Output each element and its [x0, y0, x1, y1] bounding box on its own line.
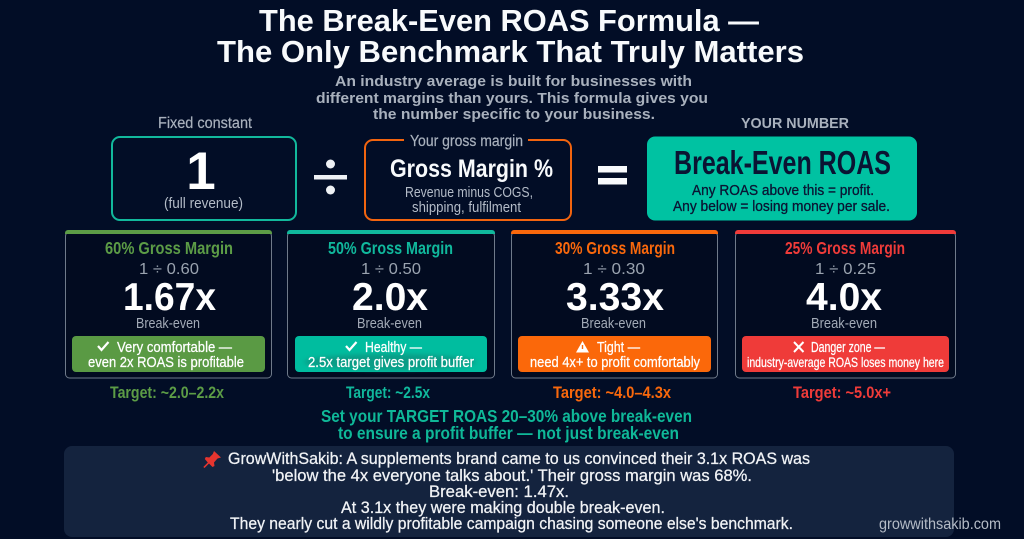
title: The Break-Even ROAS Formula — [259, 3, 759, 38]
case study text: At 3.1x they were making double break-even. [341, 499, 665, 517]
target ROAS advice [321, 406, 692, 443]
panel: GrowWithSakib case study [64, 446, 954, 537]
icon: equals sign [598, 166, 627, 184]
intro text: different margins than yours. This formula gives you [316, 90, 708, 107]
target: 60% margin: Target: ~2.0–2.2x [110, 383, 224, 402]
formula term: fixed constant: (full revenue) [164, 195, 243, 212]
panel: 50% margin card: 1 ÷ 0.50 [361, 261, 421, 278]
formula term: gross margin: shipping, fulfilment [412, 200, 521, 216]
formula result: break-even ROAS: Any below = losing money per sale. [673, 199, 890, 215]
target ROAS advice: to ensure a profit buffer — not just break-even [338, 423, 679, 443]
target ROAS advice: Set your TARGET ROAS 20–30% above break-even [321, 406, 692, 426]
panel: 30% margin card: 3.33x [566, 276, 664, 319]
formula term: fixed constant [112, 115, 296, 220]
formula result: break-even ROAS: Break-Even ROAS [674, 144, 891, 181]
case study text: 'below the 4x everyone talks about.' Their gross margin was 68%. [272, 467, 752, 485]
status pill: very comfortable: Very comfortable — [117, 339, 232, 356]
intro text: the number specific to your business. [373, 106, 655, 123]
panel: 30% margin card: Break-even [581, 316, 646, 332]
icon: divide sign [314, 160, 347, 194]
panel: 25% margin card: Break-even [811, 316, 877, 332]
target: 30% margin: Target: ~4.0–4.3x [553, 383, 671, 402]
panel: 30% margin card: 30% Gross Margin [555, 238, 675, 258]
panel: 25% margin card: 25% Gross Margin [785, 238, 905, 258]
formula term: gross margin: Revenue minus COGS, [405, 185, 533, 201]
formula term: gross margin [365, 133, 571, 220]
panel: 50% margin card: Break-even [357, 316, 422, 332]
status pill: danger zone: industry-average ROAS loses money here [747, 354, 944, 370]
target: 25% margin: Target: ~5.0x+ [793, 383, 891, 402]
formula term: gross margin: Your gross margin [410, 133, 523, 150]
icon: pushpin [203, 451, 221, 468]
case study text: GrowWithSakib: A supplements brand came to us convinced their 3.1x ROAS was [228, 450, 810, 468]
panel: 60% margin card: 60% Gross Margin [105, 238, 233, 258]
target: 50% margin: Target: ~2.5x [346, 383, 430, 402]
panel: 30% margin card: 1 ÷ 0.30 [583, 261, 645, 278]
formula result: break-even ROAS [647, 115, 917, 220]
status pill: danger zone: Danger zone — [811, 339, 885, 356]
case study text [228, 450, 810, 533]
case study text: They nearly cut a wildly profitable campaign chasing someone else's benchmark. [230, 515, 793, 533]
title [217, 3, 804, 69]
status pill: tight: need 4x+ to profit comfortably [530, 354, 700, 371]
panel: 50% margin card [287, 230, 495, 378]
status pill: tight [518, 336, 711, 372]
panel: 50% margin card: 50% Gross Margin [328, 238, 453, 258]
status pill: healthy: Healthy — [365, 339, 422, 356]
status pill: healthy [295, 336, 487, 372]
panel: 25% margin card: 1 ÷ 0.25 [815, 261, 876, 278]
panel: 60% margin card: 1 ÷ 0.60 [139, 261, 199, 278]
status pill: very comfortable: even 2x ROAS is profitable [88, 354, 244, 371]
panel: 60% margin card: 1.67x [123, 276, 216, 319]
panel: 30% margin card [511, 230, 718, 378]
status pill: tight: Tight — [597, 339, 640, 356]
panel: 60% margin card [65, 230, 272, 378]
intro text: An industry average is built for businesses with [335, 73, 692, 90]
panel: 60% margin card: Break-even [136, 316, 200, 332]
status pill: danger zone [742, 336, 949, 372]
intro text [316, 73, 708, 123]
case study text: Break-even: 1.47x. [429, 483, 569, 501]
formula term: fixed constant: 1 [186, 142, 216, 201]
title: The Only Benchmark That Truly Matters [217, 34, 804, 69]
formula term: gross margin: Gross Margin % [390, 155, 553, 183]
formula result: break-even ROAS: YOUR NUMBER [741, 115, 849, 132]
status pill: healthy: 2.5x target gives profit buffer [308, 354, 474, 371]
panel: 25% margin card: 4.0x [806, 276, 882, 319]
panel: 25% margin card [735, 230, 956, 378]
watermark: growwithsakib.com [879, 516, 1001, 533]
status pill: very comfortable [72, 336, 265, 372]
formula result: break-even ROAS: Any ROAS above this = profit. [692, 183, 874, 199]
formula term: fixed constant: Fixed constant [158, 115, 253, 132]
panel: 50% margin card: 2.0x [352, 276, 428, 319]
